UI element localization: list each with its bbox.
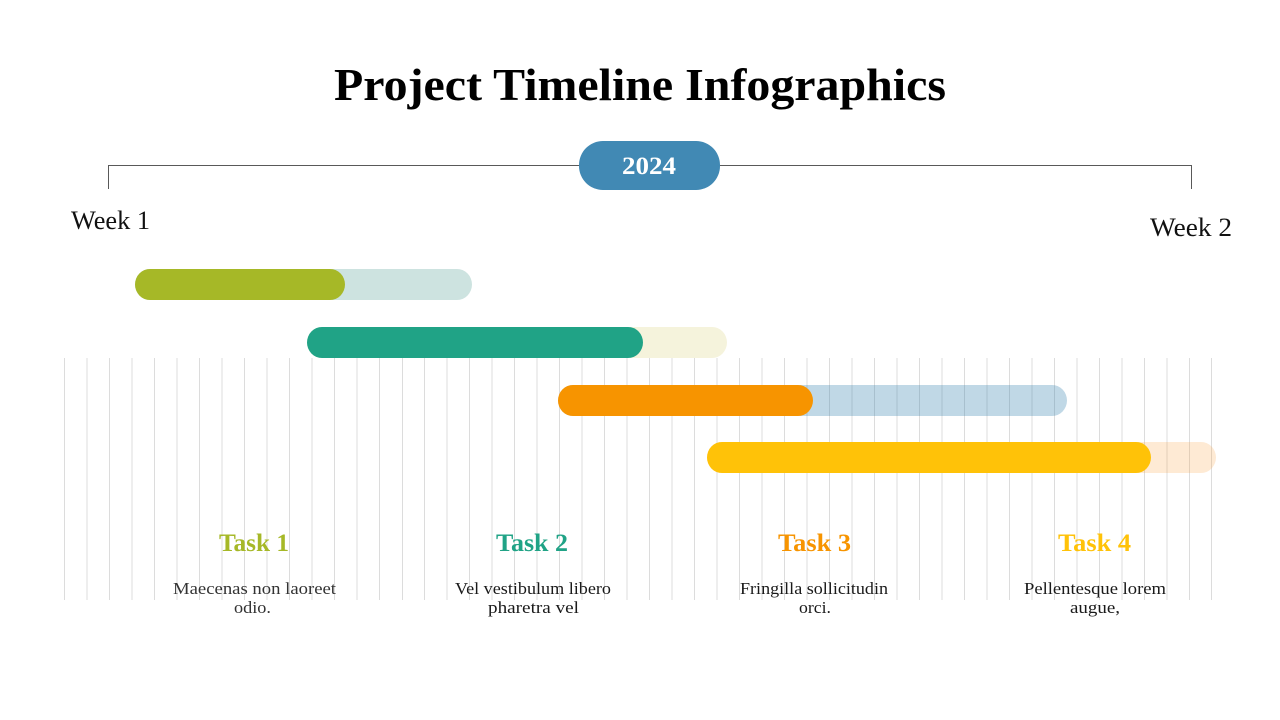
label: week 2: Week 2 — [1150, 213, 1232, 242]
gantt bar: task 1 — [135, 269, 472, 300]
task 3 text: Task 3 — [778, 530, 851, 557]
title: Project Timeline Infographics — [334, 59, 946, 110]
task 2 text: pharetra vel — [488, 598, 579, 617]
timeline bracket — [108, 166, 1192, 189]
task 4 text: augue, — [1070, 598, 1120, 617]
task 4 text: Pellentesque lorem — [1024, 579, 1166, 598]
task 1 text: Task 1 — [219, 530, 289, 557]
task 1 text: odio. — [234, 598, 271, 617]
task 2 text: Vel vestibulum libero — [455, 579, 611, 598]
gantt bar: task 4 — [707, 442, 1216, 473]
gantt bar: task 2 — [307, 327, 727, 358]
task 2 text: Task 2 — [496, 530, 568, 557]
task 1 text — [173, 530, 336, 617]
task 4 text — [1024, 530, 1166, 617]
task 1 text: Maecenas non laoreet — [173, 579, 336, 598]
label: week 1: Week 1 — [71, 206, 150, 235]
year pill: 2024 — [579, 141, 720, 190]
task 4 text: Task 4 — [1058, 530, 1132, 557]
task 3 text — [740, 530, 889, 617]
gantt bar: task 3 — [558, 385, 1067, 416]
task 3 text: orci. — [799, 598, 831, 617]
task 3 text: Fringilla sollicitudin — [740, 579, 889, 598]
year pill: 2024: 2024 — [622, 153, 677, 180]
task 2 text — [455, 530, 611, 617]
